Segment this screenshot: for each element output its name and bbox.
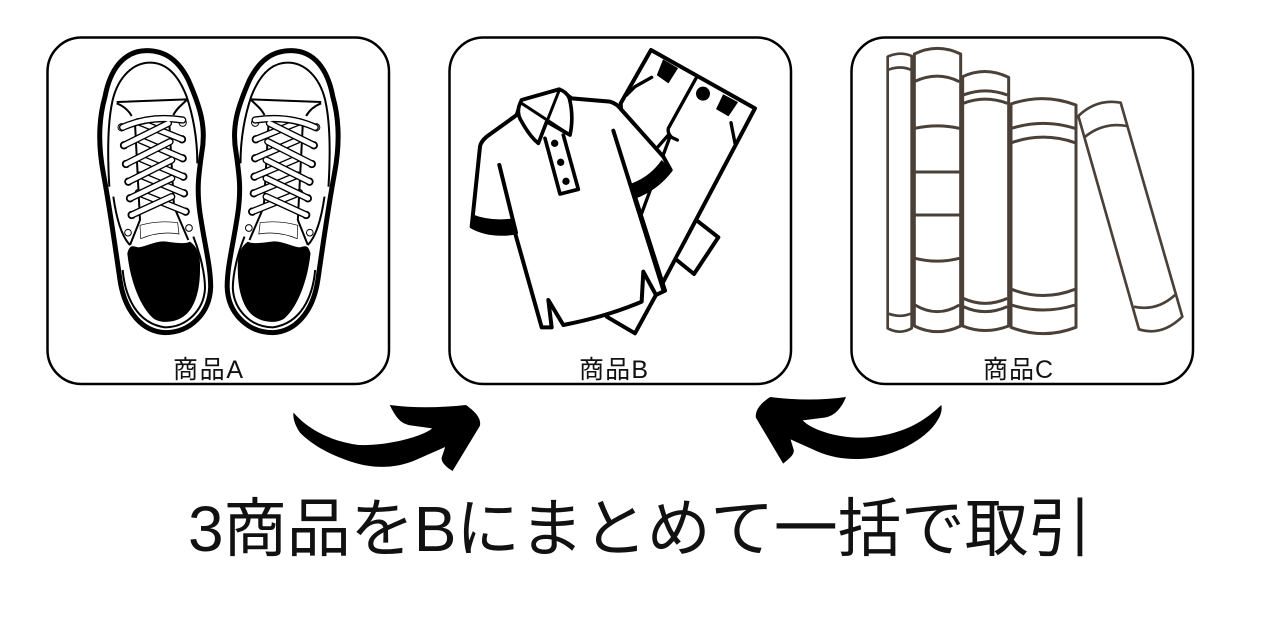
arrow: from C toward B bbox=[756, 397, 942, 464]
title: 3商品をBにまとめて一括で取引 bbox=[188, 493, 1092, 565]
icon: book 4 bbox=[1011, 99, 1076, 334]
panel: product C bbox=[852, 38, 1193, 384]
icon: polo shirt and trousers bbox=[470, 50, 755, 333]
icon: pair of sneakers bbox=[100, 51, 338, 333]
arrow: from A toward B bbox=[293, 405, 480, 471]
panel: product A bbox=[48, 38, 389, 384]
icon: row of books bbox=[888, 48, 1182, 334]
label: product B: 商品B bbox=[579, 356, 648, 384]
icon: polo shirt bbox=[470, 89, 672, 327]
label: product A: 商品A bbox=[173, 356, 243, 384]
icon: left sneaker bbox=[100, 51, 211, 333]
icon: right sneaker bbox=[227, 51, 338, 333]
icon: book 1 bbox=[888, 54, 912, 332]
panel: product B bbox=[450, 38, 791, 384]
icon: leaning book bbox=[1078, 102, 1182, 331]
icon: book 3 bbox=[963, 71, 1009, 330]
icon: book 2 bbox=[914, 48, 961, 332]
label: product C: 商品C bbox=[983, 356, 1053, 384]
icon: trousers bbox=[607, 50, 755, 333]
